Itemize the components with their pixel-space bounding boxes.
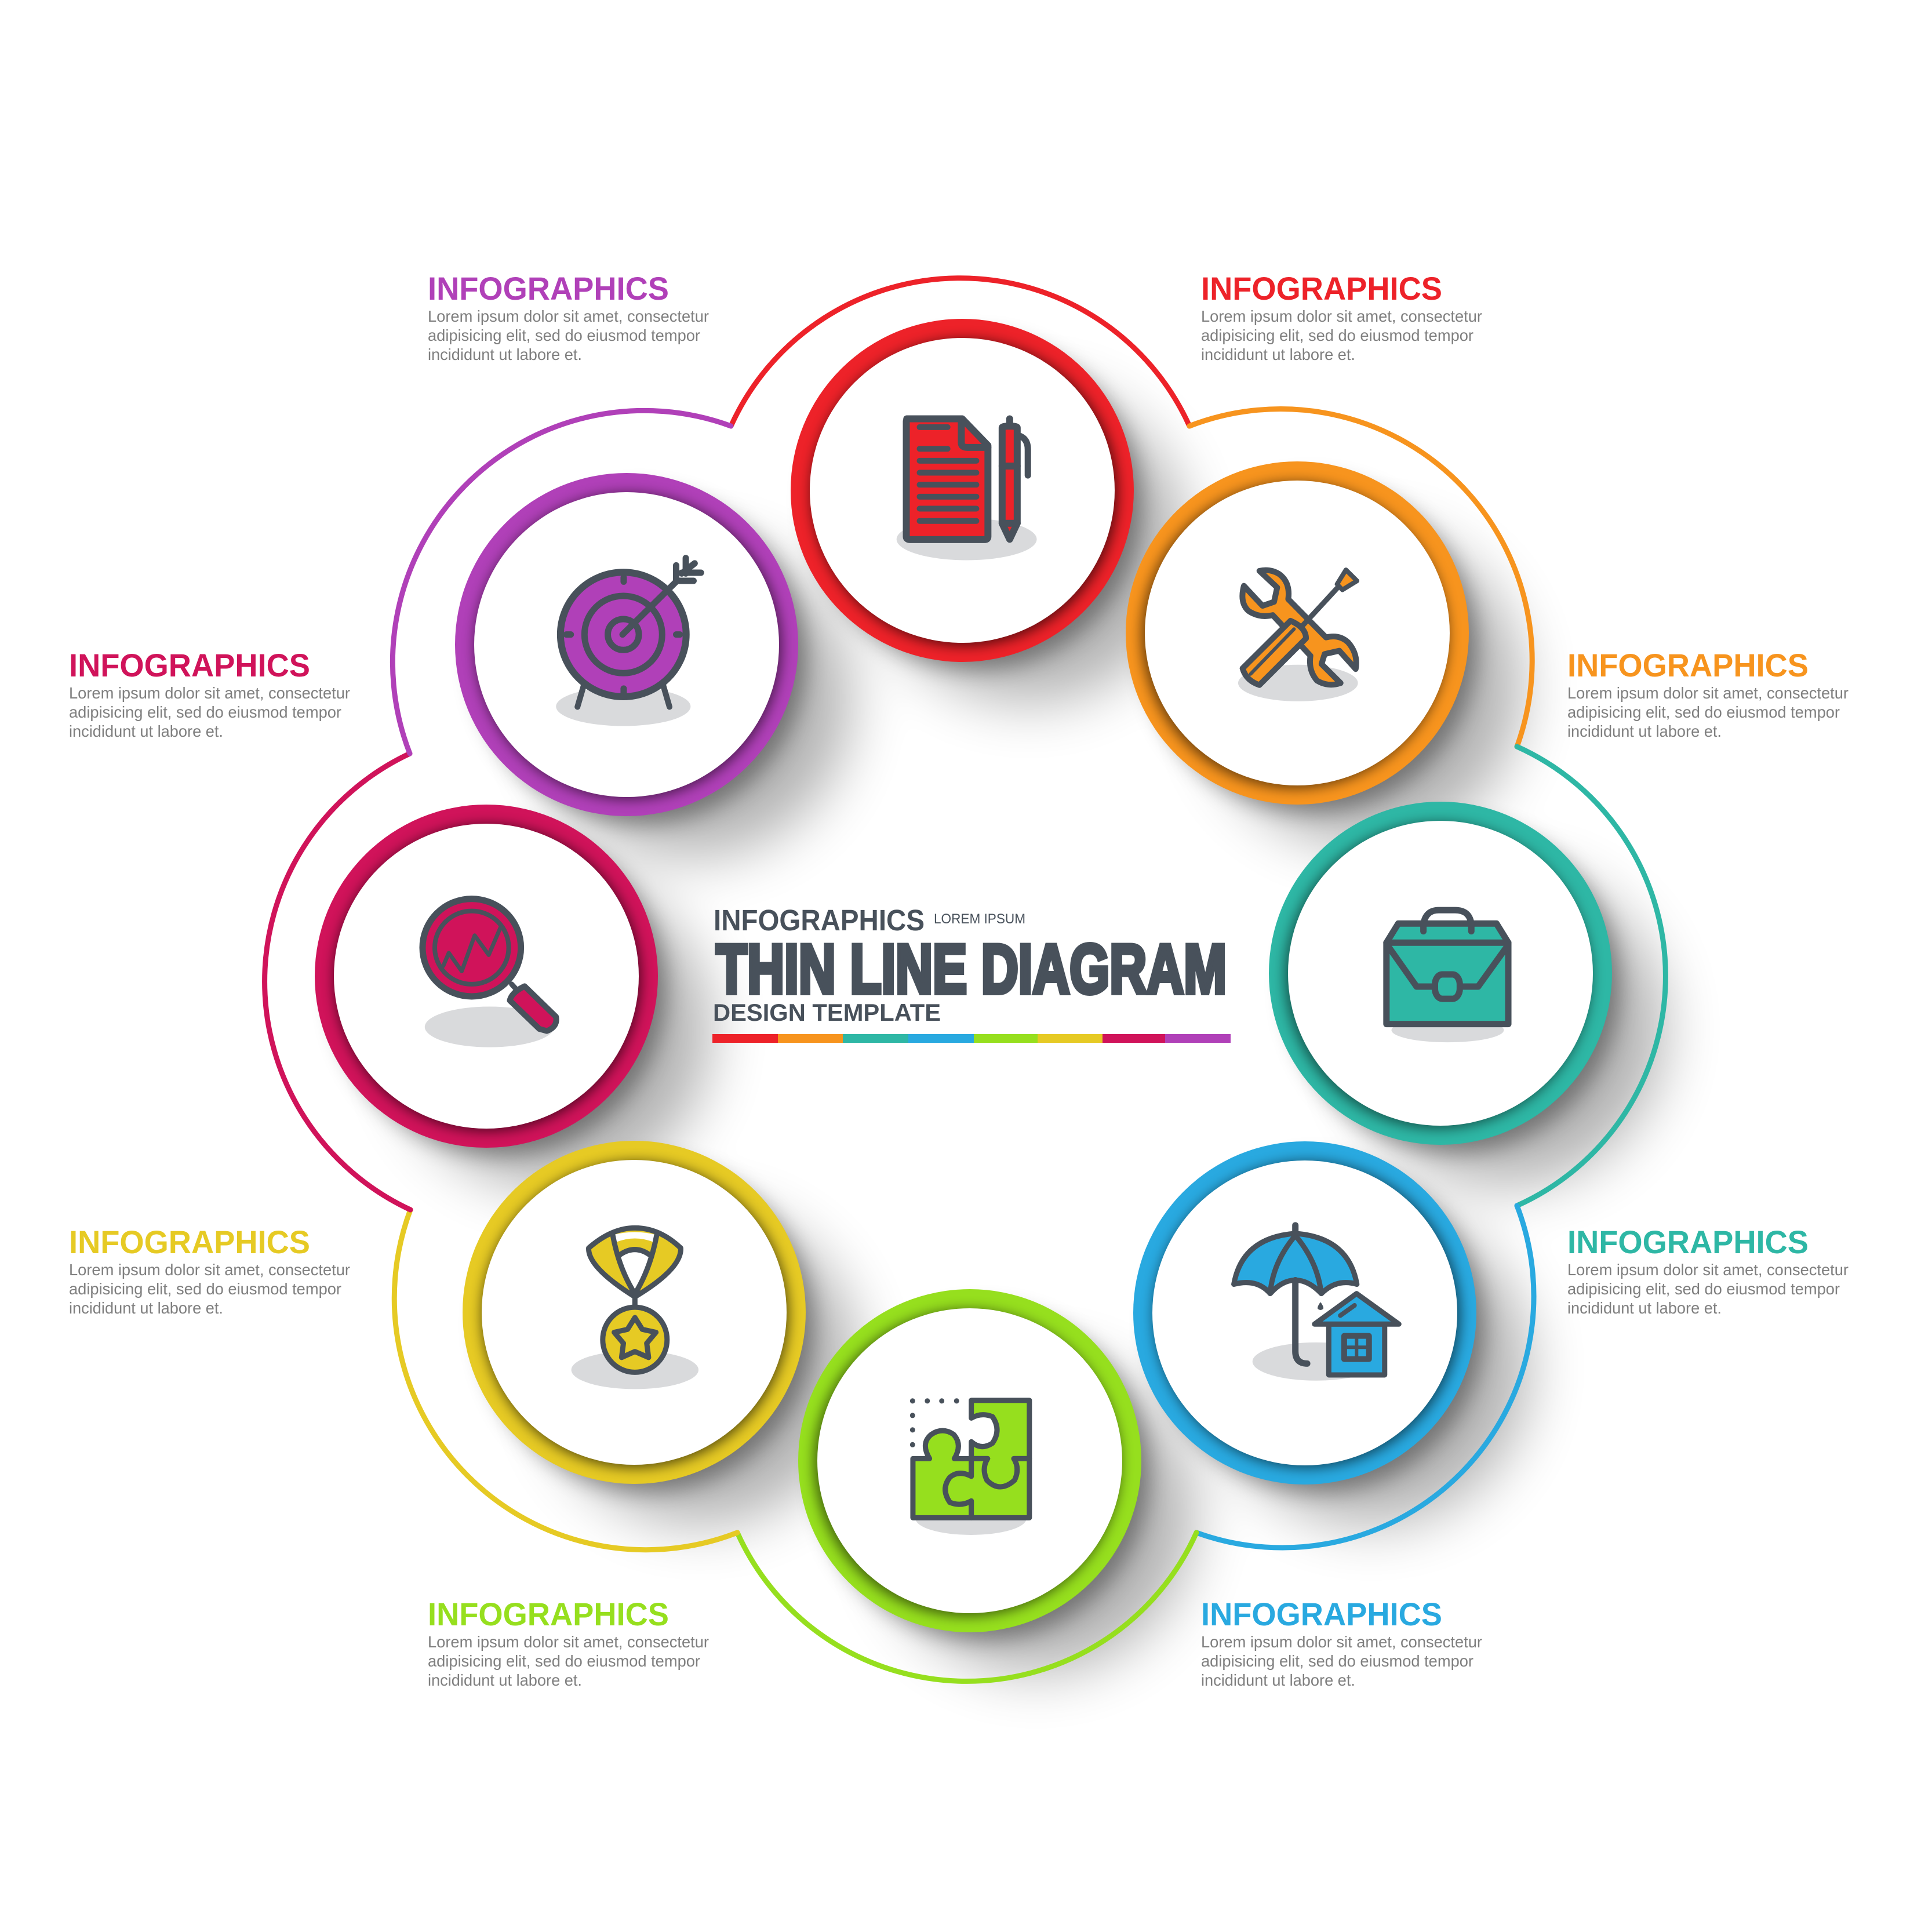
- text block: yellow: incididunt ut labore et.: [69, 1299, 223, 1317]
- text block: yellow: Lorem ipsum dolor sit amet, consectetur: [69, 1261, 350, 1279]
- text block: crimson: [69, 647, 350, 740]
- center title: [713, 904, 1227, 1026]
- circle: yellow medal: [463, 1141, 806, 1484]
- icon: puzzle pieces: [910, 1398, 1029, 1535]
- text block: crimson: incididunt ut labore et.: [69, 722, 223, 740]
- text block: red: [1201, 270, 1482, 363]
- text block: crimson: Lorem ipsum dolor sit amet, consectetur: [69, 684, 350, 702]
- center title: THIN LINE DIAGRAM: [716, 930, 1227, 1008]
- icon: wrench and screwdriver: [1238, 570, 1358, 701]
- circle: purple target: [455, 473, 798, 816]
- text block: crimson: adipisicing elit, sed do eiusmod tempor: [69, 703, 341, 721]
- text block: green: incididunt ut labore et.: [428, 1671, 582, 1689]
- text block: yellow: INFOGRAPHICS: [69, 1224, 310, 1260]
- text block: teal: [1567, 1224, 1849, 1317]
- text block: red: incididunt ut labore et.: [1201, 345, 1355, 363]
- text block: teal: adipisicing elit, sed do eiusmod tempor: [1567, 1280, 1840, 1298]
- text block: orange: incididunt ut labore et.: [1567, 722, 1722, 740]
- center title: LOREM IPSUM: [934, 911, 1025, 927]
- text block: crimson: INFOGRAPHICS: [69, 647, 310, 683]
- circle: orange tools: [1126, 461, 1469, 805]
- text block: teal: Lorem ipsum dolor sit amet, consectetur: [1567, 1261, 1849, 1279]
- circle: blue umbrella and house: [1133, 1141, 1476, 1485]
- text block: red: Lorem ipsum dolor sit amet, consectetur: [1201, 307, 1482, 325]
- circle: green puzzle: [798, 1289, 1141, 1632]
- text block: purple: Lorem ipsum dolor sit amet, consectetur: [428, 307, 709, 325]
- text block: green: adipisicing elit, sed do eiusmod tempor: [428, 1652, 700, 1670]
- text block: purple: adipisicing elit, sed do eiusmod tempor: [428, 326, 700, 344]
- text block: yellow: adipisicing elit, sed do eiusmod tempor: [69, 1280, 341, 1298]
- icon: umbrella and house: [1234, 1225, 1399, 1381]
- text block: yellow: [69, 1224, 350, 1317]
- icon: medal: [572, 1228, 698, 1389]
- icon: document and pen: [897, 419, 1037, 560]
- text block: blue: INFOGRAPHICS: [1201, 1596, 1442, 1632]
- text block: purple: [428, 270, 709, 363]
- text block: blue: incididunt ut labore et.: [1201, 1671, 1355, 1689]
- icon: briefcase: [1387, 910, 1508, 1042]
- center title: INFOGRAPHICS: [714, 904, 925, 937]
- text block: teal: INFOGRAPHICS: [1567, 1224, 1809, 1260]
- text block: red: INFOGRAPHICS: [1201, 270, 1442, 307]
- text block: orange: [1567, 647, 1849, 740]
- text block: green: INFOGRAPHICS: [428, 1596, 669, 1632]
- text block: blue: Lorem ipsum dolor sit amet, consectetur: [1201, 1633, 1482, 1651]
- icon: target and arrow: [556, 558, 701, 726]
- circle: crimson magnifier: [315, 805, 658, 1148]
- text block: orange: INFOGRAPHICS: [1567, 647, 1809, 683]
- text block: green: [428, 1596, 709, 1689]
- text block: teal: incididunt ut labore et.: [1567, 1299, 1722, 1317]
- soft drop shadows: [332, 336, 1664, 1672]
- text block: green: Lorem ipsum dolor sit amet, consectetur: [428, 1633, 709, 1651]
- circle: teal briefcase: [1269, 802, 1612, 1145]
- circle: red document: [791, 319, 1134, 662]
- text block: orange: adipisicing elit, sed do eiusmod tempor: [1567, 703, 1840, 721]
- flower outline arcs: [265, 278, 1665, 1681]
- rainbow color bar: [712, 1034, 1231, 1043]
- text block: blue: adipisicing elit, sed do eiusmod tempor: [1201, 1652, 1473, 1670]
- text block: blue: [1201, 1596, 1482, 1689]
- icon: magnifier: [423, 899, 556, 1047]
- center title: DESIGN TEMPLATE: [713, 999, 941, 1026]
- text block: purple: INFOGRAPHICS: [428, 270, 669, 307]
- text block: red: adipisicing elit, sed do eiusmod tempor: [1201, 326, 1473, 344]
- text block: purple: incididunt ut labore et.: [428, 345, 582, 363]
- text block: orange: Lorem ipsum dolor sit amet, consectetur: [1567, 684, 1849, 702]
